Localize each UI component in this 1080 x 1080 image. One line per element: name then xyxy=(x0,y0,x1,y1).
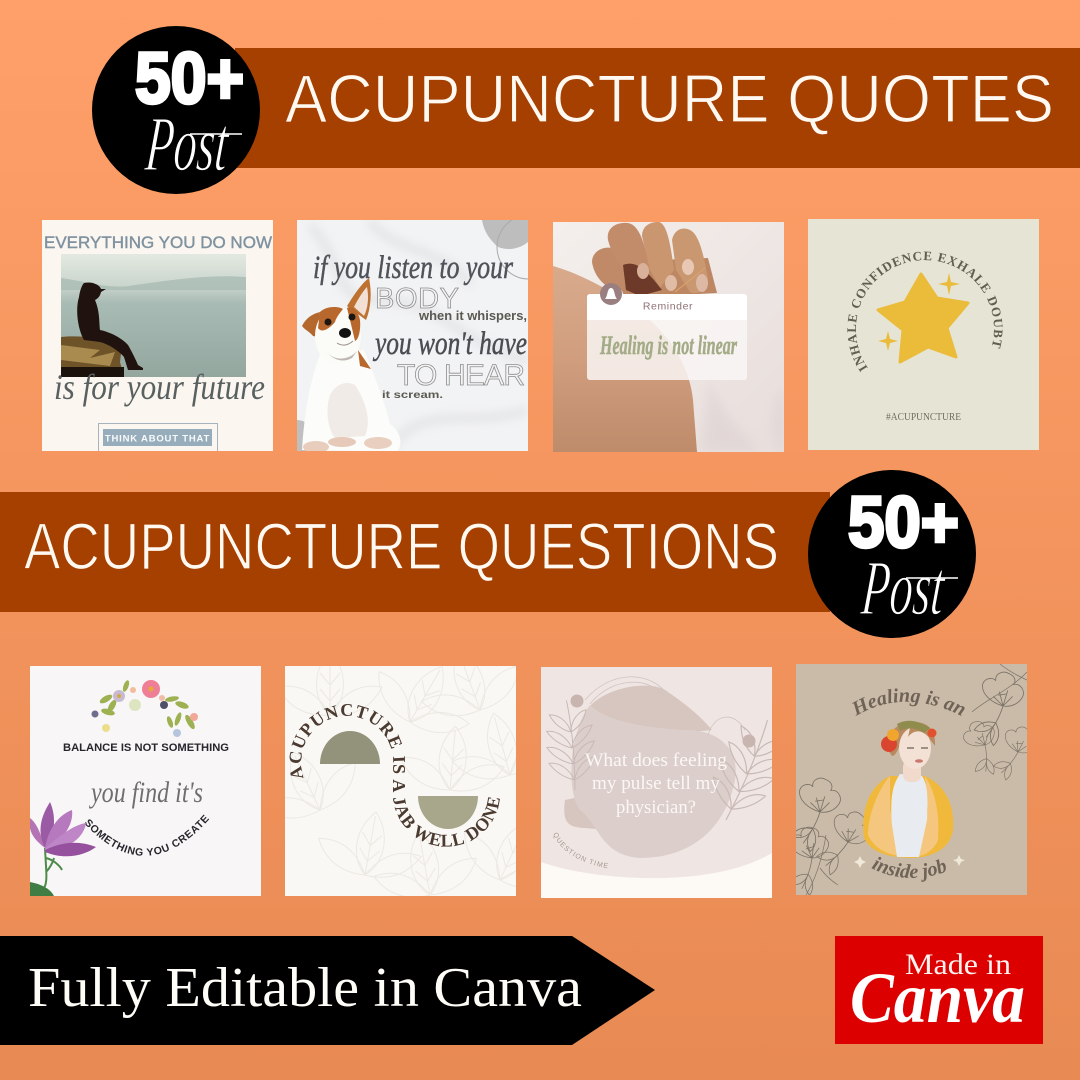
reminder panel: Healing is not linear xyxy=(599,331,738,360)
star icon xyxy=(878,274,968,362)
banner heading: ACUPUNCTURE QUESTIONS xyxy=(24,509,779,583)
made in canva badge: Canva xyxy=(850,958,1025,1038)
question text: physician? xyxy=(616,797,696,818)
floral wreath xyxy=(92,680,198,737)
badge: 50+ post (middle): Post xyxy=(858,546,949,632)
hashtag: #ACUPUNCTURE xyxy=(886,412,961,423)
sparkle icon xyxy=(878,331,898,351)
outlined to hear: TO HEAR xyxy=(397,359,525,392)
card: healing is an inside job xyxy=(796,664,1027,895)
badge: 50+ post (top): 50+ xyxy=(135,39,244,119)
made in canva badge: Made in xyxy=(905,948,1011,981)
bottom-row banner: acupuncture questions xyxy=(0,492,830,612)
card: listen to your body xyxy=(297,220,528,451)
s-curved text: ACUPUNCTURE IS A JAB WELL DONE xyxy=(290,704,500,847)
dog illustration xyxy=(302,278,400,453)
hand holding needle xyxy=(592,222,717,298)
badge: 50+ post (middle) xyxy=(808,470,976,638)
sparkles xyxy=(854,855,965,868)
half circle top xyxy=(320,731,380,764)
curved bottom text: inside job xyxy=(872,856,946,882)
shoulder skin xyxy=(553,266,697,452)
blob shape xyxy=(571,705,736,858)
caps line: BALANCE IS NOT SOMETHING xyxy=(63,742,229,754)
script line 1: if you listen to your xyxy=(313,250,513,286)
shirt folds xyxy=(706,402,740,446)
purple flower xyxy=(30,802,96,896)
curved label: QUESTION TIME xyxy=(553,832,608,868)
photo: woman on cliff xyxy=(61,254,246,377)
small line: when it whispers, xyxy=(418,308,527,323)
small closing line: it scream. xyxy=(382,390,443,401)
banner bar xyxy=(0,492,830,612)
leaf sprig right xyxy=(701,709,792,831)
think about that tag: THINK ABOUT THAT xyxy=(105,434,210,444)
card: healing is not linear xyxy=(553,222,784,452)
card: balance is not something xyxy=(30,666,261,896)
top banner: acupuncture quotes xyxy=(235,48,1080,168)
curved caps text: SOMETHING YOU CREATE xyxy=(85,814,210,856)
brush shape xyxy=(564,686,712,835)
white lower wave xyxy=(541,853,772,898)
card: inhale confidence exhale doubt xyxy=(808,219,1039,450)
card: what does feeling my pulse tell my physician xyxy=(541,667,772,898)
badge: 50+ post (middle): 50+ xyxy=(848,483,959,563)
think about that tag xyxy=(98,424,218,454)
reminder panel: Reminder xyxy=(643,300,693,312)
line flowers top right xyxy=(954,664,1037,784)
half circle bottom xyxy=(418,796,478,829)
footer arrow: fully editable in canva xyxy=(0,936,655,1045)
curved text: INHALE CONFIDENCE EXHALE DOUBT xyxy=(847,252,1003,372)
leaf sprig left xyxy=(541,697,601,793)
dot right xyxy=(742,734,756,748)
question text: What does feeling xyxy=(585,750,728,771)
script line 2: you won't have xyxy=(373,326,527,362)
corner circle decoration xyxy=(297,220,528,451)
woman illustration xyxy=(863,721,953,858)
sparkle icon xyxy=(938,273,960,295)
footer arrow: fully editable in canva: Fully Editable in Canva xyxy=(28,957,582,1019)
botanical line pattern xyxy=(285,666,516,896)
question text: my pulse tell my xyxy=(592,773,720,794)
script line: is for your future xyxy=(54,367,265,407)
curved top text: Healing is an xyxy=(852,688,965,716)
dot left xyxy=(570,694,584,708)
question text xyxy=(585,750,728,818)
outlined word body: BODY xyxy=(375,283,459,315)
made in canva badge xyxy=(835,936,1043,1044)
badge: 50+ post (top): Post xyxy=(142,102,233,188)
banner bar xyxy=(235,48,1080,168)
marble texture xyxy=(310,220,528,450)
fine arcs xyxy=(585,677,745,735)
badge: 50+ post (top) xyxy=(92,26,260,194)
line flowers bottom left xyxy=(781,778,874,898)
card: acupuncture is a jab well done xyxy=(285,666,516,896)
bell icon xyxy=(600,283,622,305)
reminder panel xyxy=(587,283,747,380)
script line: you find it's xyxy=(89,776,203,809)
card: everything you do now xyxy=(42,220,273,454)
card heading: EVERYTHING YOU DO NOW xyxy=(44,234,272,252)
